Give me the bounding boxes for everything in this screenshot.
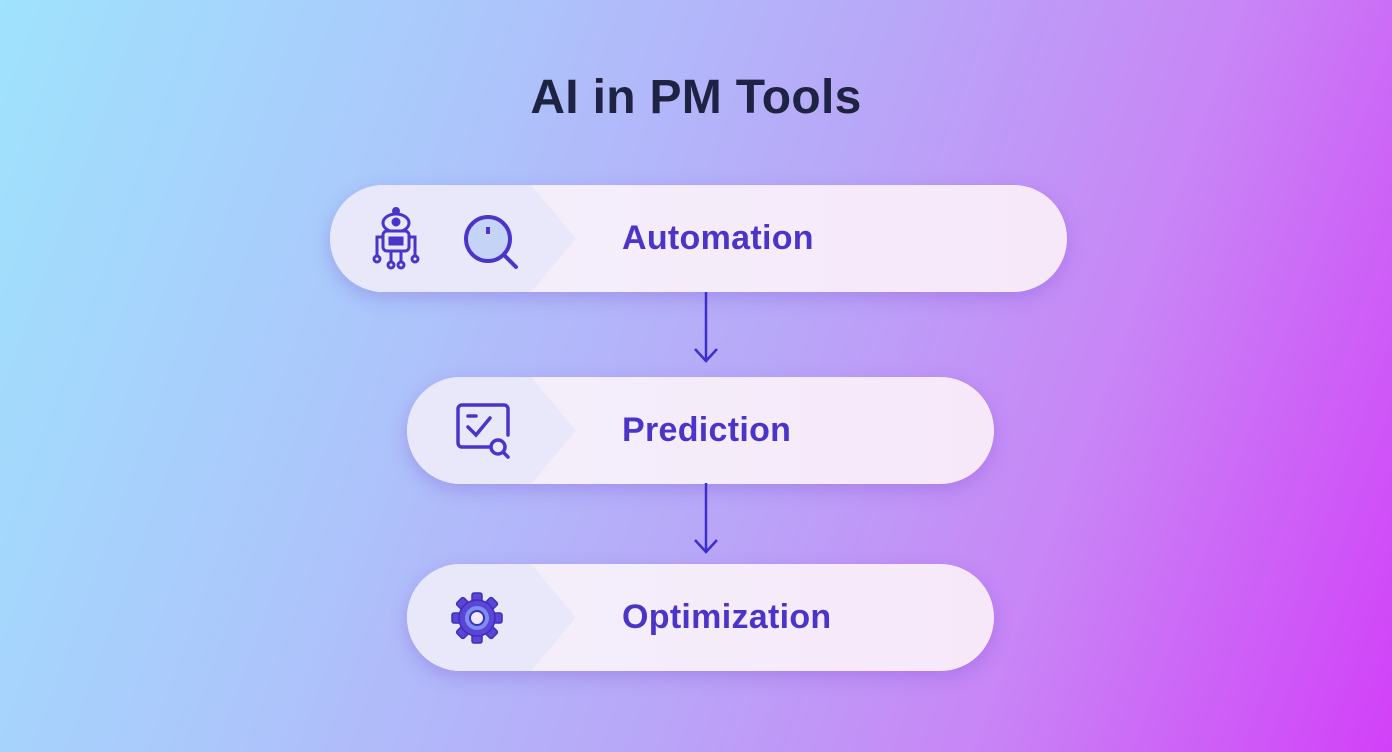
icon: robot: [372, 207, 420, 270]
title: AI in PM Tools: [530, 71, 862, 124]
arrow: [694, 292, 718, 363]
panel: optimization: [407, 564, 994, 671]
panel: prediction: Prediction: [622, 411, 791, 449]
panel: optimization: Optimization: [622, 598, 831, 636]
icon: gear: [451, 592, 503, 644]
arrow: [694, 483, 718, 554]
icon: checklist: [456, 403, 510, 459]
panel: automation: Automation: [622, 219, 814, 257]
icon: magnifier: [464, 215, 518, 270]
panel: prediction: [407, 377, 994, 484]
panel: automation: [330, 185, 1067, 292]
